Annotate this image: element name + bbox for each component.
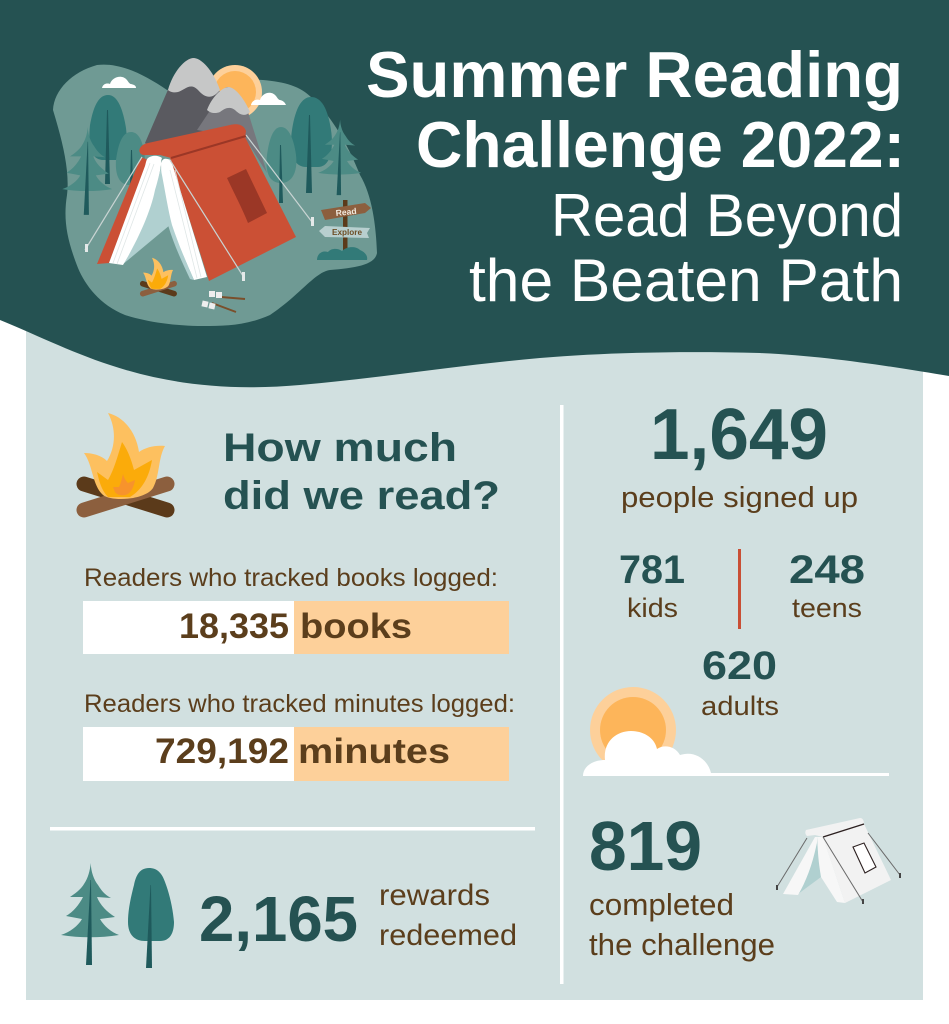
teens stat: teens: [792, 593, 862, 623]
minutes stat: 729,192: [155, 732, 289, 771]
signed up stat: [621, 395, 858, 514]
rewards stat: rewards: [379, 879, 490, 912]
title: the Beaten Path: [469, 247, 903, 314]
rewards stat: redeemed: [379, 919, 517, 952]
title: Summer Reading: [366, 38, 903, 111]
icon: sun and cloud: [583, 687, 889, 776]
icon: clouds: [102, 77, 286, 105]
teens stat: 248: [789, 548, 865, 592]
icon: signpost Read / Explore: [317, 200, 371, 260]
icon: small campfire: [143, 258, 174, 294]
completed stat: the challenge: [589, 927, 775, 962]
rewards stat: 2,165: [199, 883, 358, 955]
books stat: books: [300, 607, 412, 646]
heading: how much did we read: did we read?: [223, 474, 500, 518]
books stat: Readers who tracked books logged:: [84, 564, 498, 592]
panel: light background: [26, 320, 923, 1000]
minutes stat: [83, 690, 515, 781]
minutes stat: Readers who tracked minutes logged:: [84, 690, 515, 718]
kids stat: 781: [619, 548, 685, 592]
icon: trees: [61, 863, 174, 968]
icon: mountains: [145, 58, 267, 173]
completed stat: [589, 807, 775, 962]
illustration backdrop blob: [53, 65, 377, 326]
icon: red book tent: [85, 124, 314, 281]
rewards stat: [199, 879, 517, 955]
title: Read Beyond: [551, 182, 903, 249]
header banner: [0, 0, 949, 387]
icon: signpost Read / Explore: Read: [335, 206, 357, 218]
signed up stat: people signed up: [621, 482, 858, 514]
minutes stat: minutes: [298, 732, 450, 771]
books stat: [83, 564, 509, 654]
title: Challenge 2022:: [416, 108, 905, 181]
icon: sun behind mountains: [208, 65, 262, 119]
teens stat: [789, 548, 865, 623]
kids stat: [619, 548, 685, 623]
signed up stat: 1,649: [650, 395, 828, 475]
completed stat: 819: [589, 807, 702, 885]
icon: white book tent: [776, 818, 901, 904]
illustration: book tent scene: [53, 58, 377, 326]
icon: marshmallow sticks: [201, 291, 245, 312]
adults stat: adults: [701, 691, 779, 721]
adults stat: 620: [702, 644, 777, 688]
heading: how much did we read: How much: [223, 426, 457, 470]
kids stat: kids: [627, 593, 678, 623]
completed stat: completed: [589, 887, 734, 922]
heading: how much did we read: [223, 426, 500, 518]
adults stat: [701, 644, 779, 721]
icon: left pine: [62, 127, 112, 215]
icon: campfire: [84, 413, 167, 510]
title: [366, 38, 905, 314]
icon: background trees: [62, 95, 361, 215]
books stat: 18,335: [179, 607, 289, 646]
icon: signpost Read / Explore: Explore: [332, 227, 362, 237]
icon: right pine: [318, 120, 361, 195]
